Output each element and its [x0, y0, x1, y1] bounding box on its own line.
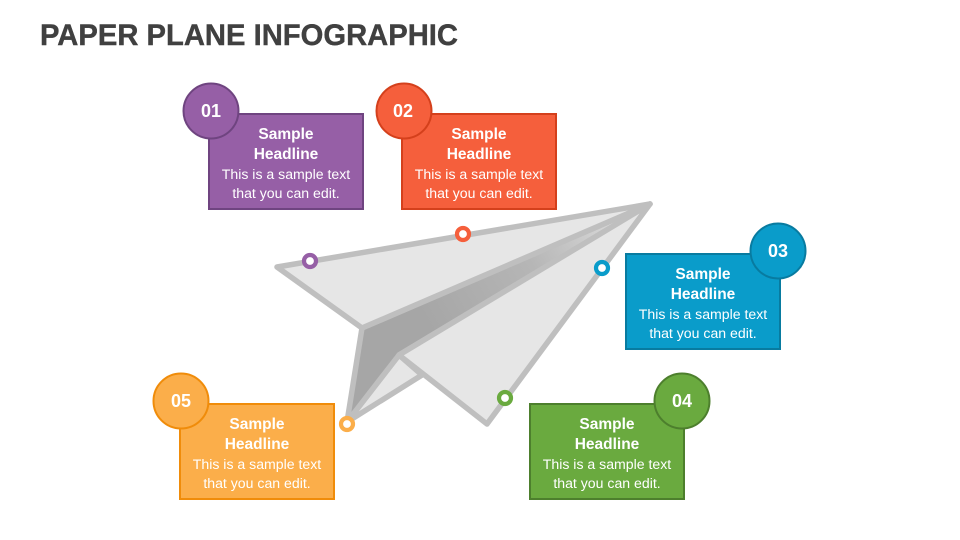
callout 01: that you can edit. — [232, 185, 340, 201]
marker 02 — [457, 228, 469, 240]
callout 04: This is a sample text — [543, 456, 671, 472]
callout 03: Sample — [675, 266, 731, 283]
callout 02: Sample — [451, 126, 507, 143]
callout 02: Headline — [447, 146, 512, 163]
callout 03: Headline — [671, 286, 736, 303]
callout 01: Headline — [254, 146, 319, 163]
callout 01: 01 — [201, 101, 221, 121]
callout 05: 05 — [171, 391, 191, 411]
callout 04 — [530, 374, 710, 499]
marker 01 — [304, 255, 316, 267]
title: PAPER PLANE INFOGRAPHIC — [40, 19, 458, 52]
callout 05: This is a sample text — [193, 456, 321, 472]
callout 02: 02 — [393, 101, 413, 121]
callout 04: that you can edit. — [553, 475, 661, 491]
marker 03 — [596, 262, 608, 274]
callout 05: Sample — [229, 416, 285, 433]
callout 03 — [626, 224, 806, 349]
marker 05 — [341, 418, 353, 430]
callout 01 — [184, 84, 363, 209]
callout 03: This is a sample text — [639, 306, 767, 322]
callout 02 — [376, 84, 556, 209]
callout 02: This is a sample text — [415, 166, 543, 182]
callout 01: Sample — [258, 126, 314, 143]
callout 05 — [154, 374, 334, 499]
callout 03: 03 — [768, 241, 788, 261]
marker 04 — [499, 392, 511, 404]
callout 05: Headline — [225, 436, 290, 453]
callout 01: This is a sample text — [222, 166, 350, 182]
callout 03: that you can edit. — [649, 325, 757, 341]
callout 04: Headline — [575, 436, 640, 453]
callout 04: Sample — [579, 416, 635, 433]
callout 02: that you can edit. — [425, 185, 533, 201]
callout 04: 04 — [672, 391, 692, 411]
callout 05: that you can edit. — [203, 475, 311, 491]
icon: paper plane — [277, 204, 650, 424]
